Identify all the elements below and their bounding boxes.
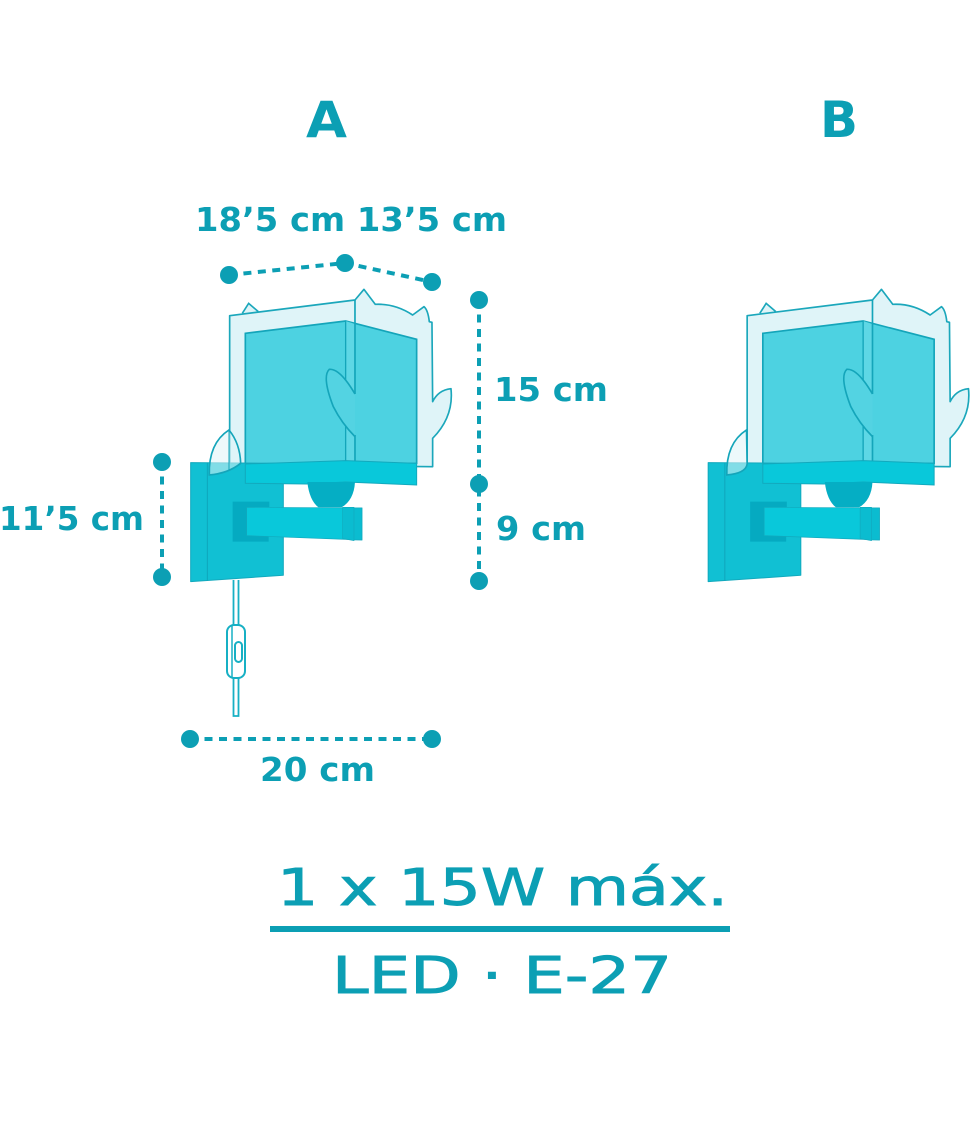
lamp B body [708,289,969,582]
heading: B: B [820,91,858,149]
heading: A: A [306,91,347,149]
dimension: wall plate height [153,453,171,586]
lamp A body [191,289,451,582]
lamp A illustration [191,289,451,716]
label: 15 cm: 15 cm [494,370,608,409]
bulb type: LED · E-27 [332,947,672,1006]
lamp B illustration [708,289,969,582]
power rating: 1 x 15W máx. [277,859,728,918]
label: 9 cm: 9 cm [496,509,586,548]
rating divider [270,926,730,932]
dimension: top width [220,254,441,291]
dimension: depth [181,730,441,748]
dimension: vertical height [470,291,488,590]
label: 20 cm: 20 cm [260,750,375,789]
label: 11'5 cm: 11’5 cm [0,499,144,538]
lamp A cord and switch [227,580,245,716]
label: top dimensions: 18’5 cm 13’5 cm [195,200,507,239]
